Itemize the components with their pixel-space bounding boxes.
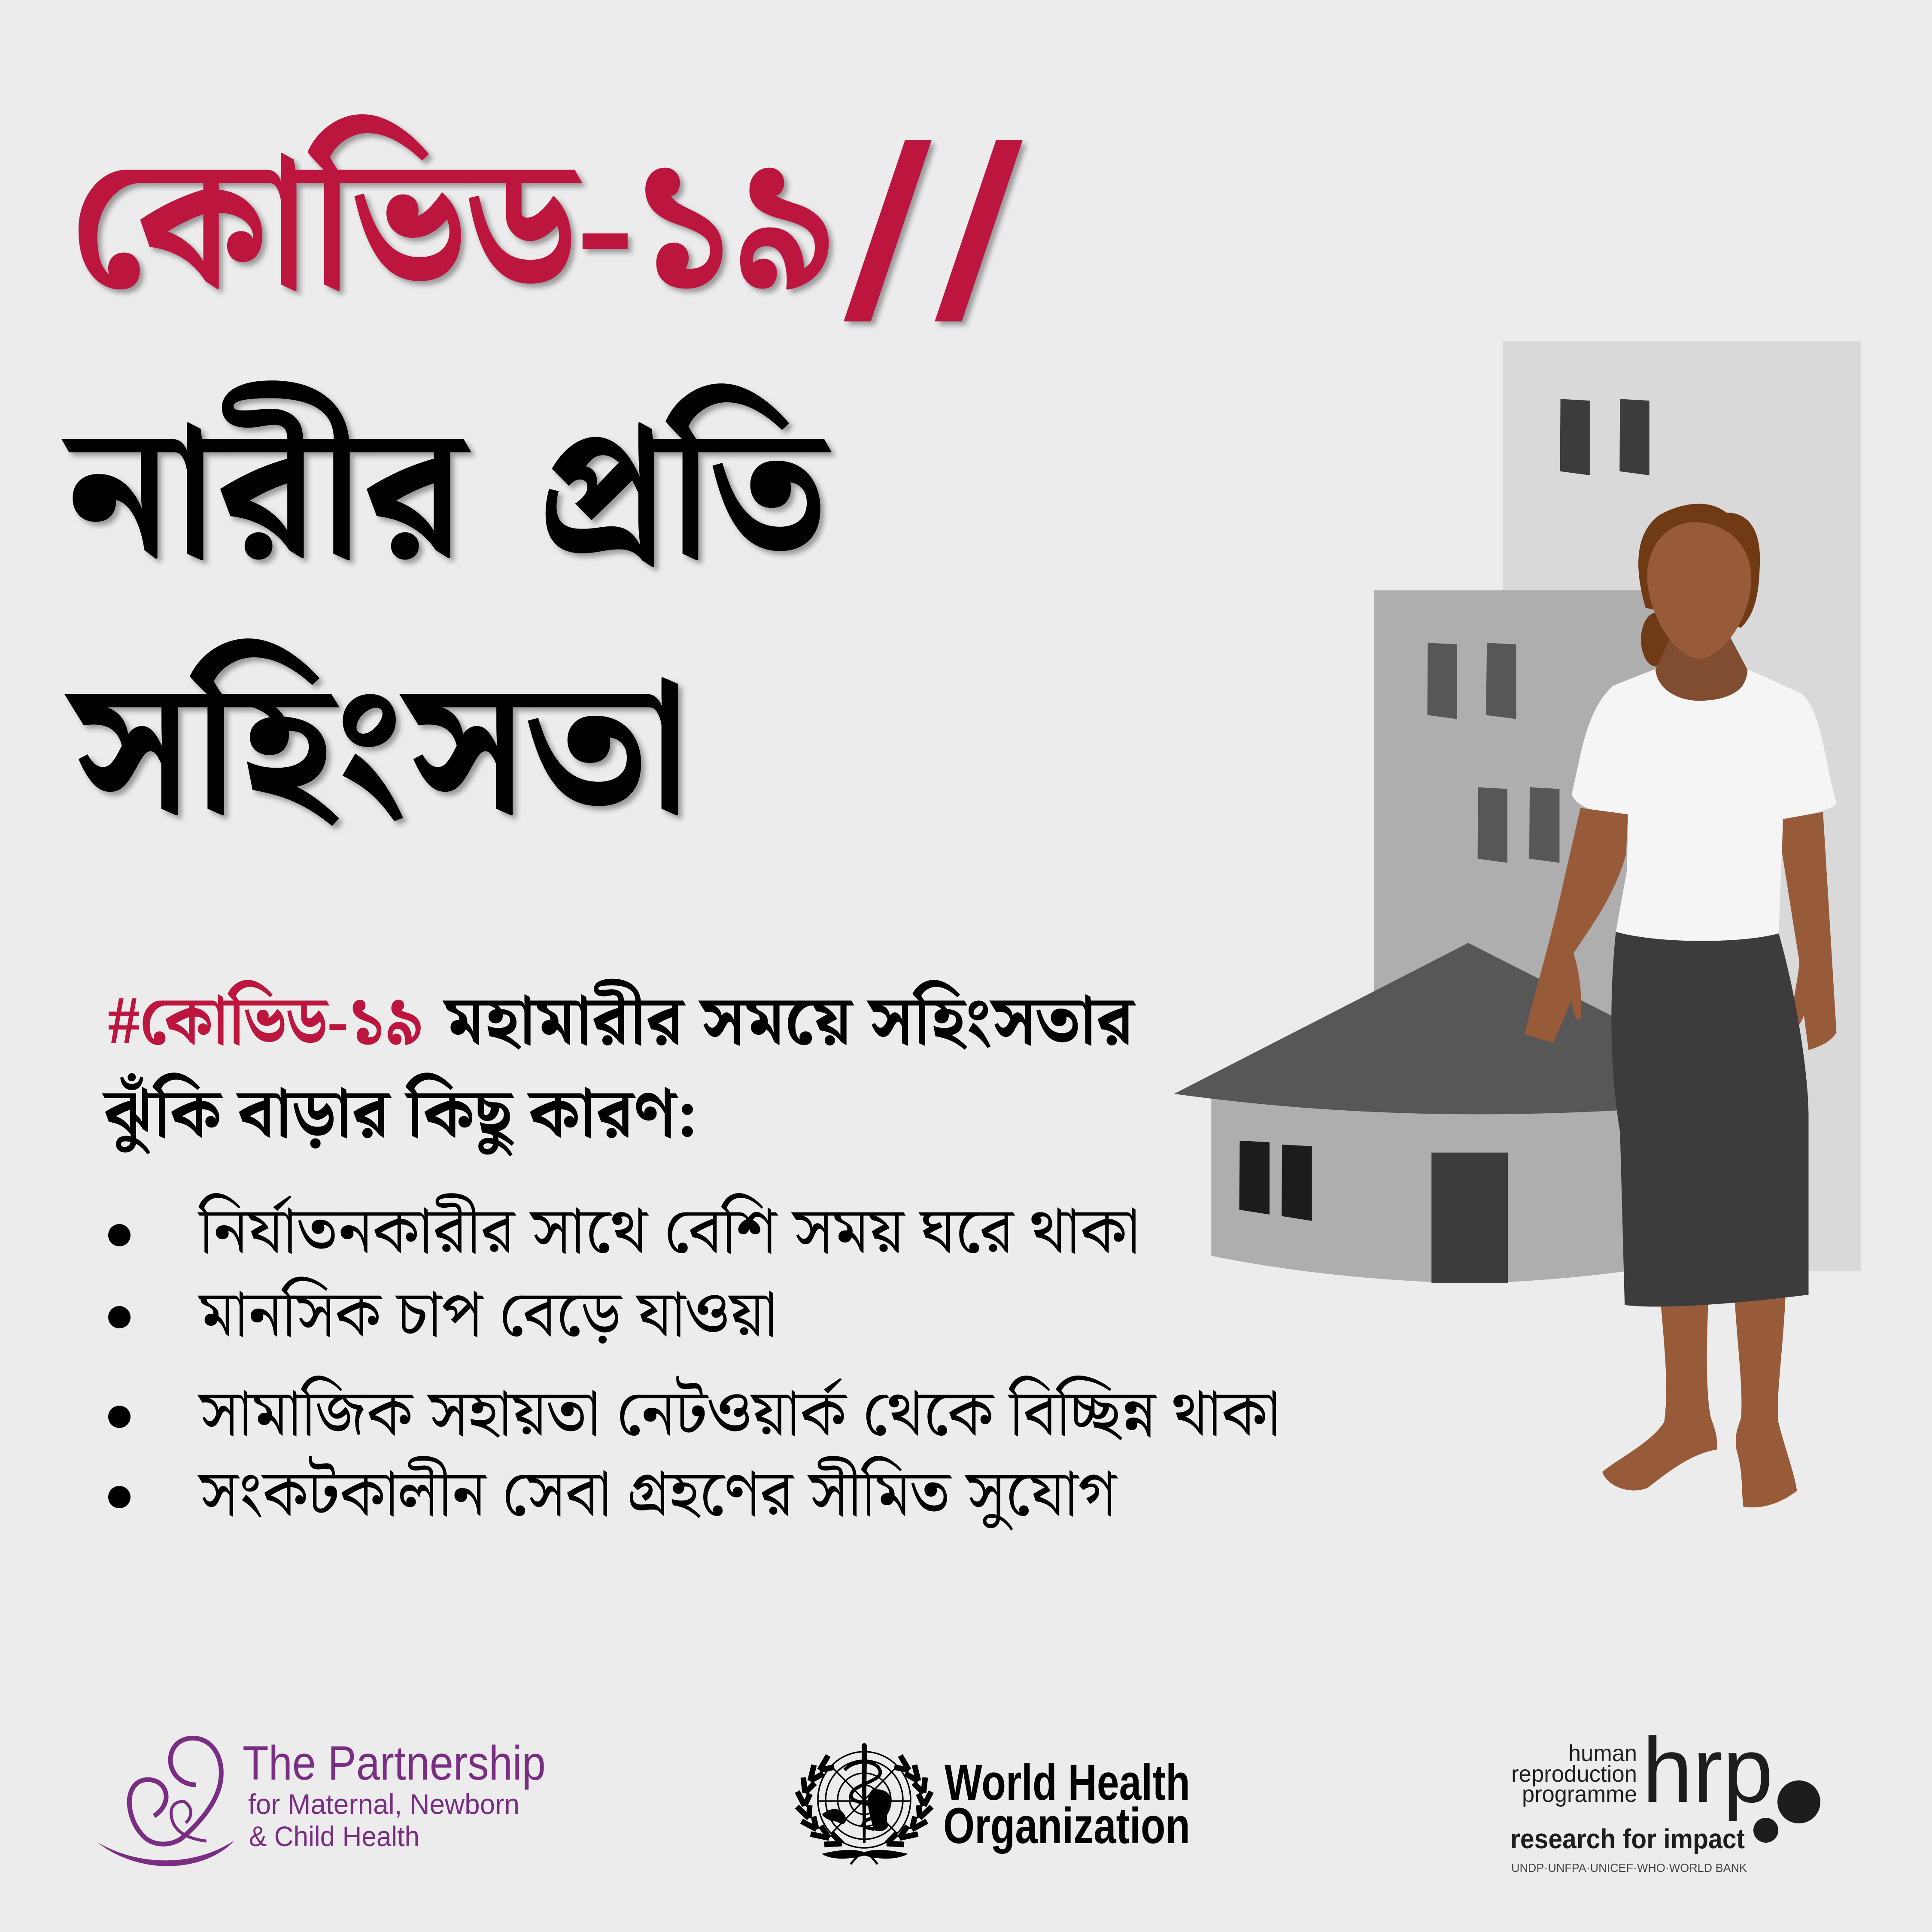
logo: World Health Organization — [797, 1743, 1190, 1864]
neck — [1655, 636, 1747, 701]
dots — [1753, 1780, 1820, 1843]
title: violence against women, first line: নারীর — [59, 378, 474, 594]
illustration: buildings, house and woman — [1174, 341, 1861, 1507]
logo: human reproduction programme — [1510, 1718, 1820, 1874]
globe — [818, 1752, 911, 1848]
logo text: & Child Health — [249, 1820, 419, 1852]
hair and bun — [1641, 613, 1672, 667]
logo text — [243, 1736, 546, 1852]
intro text block: মহামারীর সময়ে সহিংসতার — [442, 978, 1136, 1058]
title: violence against women, first line — [59, 378, 834, 594]
wreath left — [797, 1756, 842, 1844]
logo text: Organization — [943, 1798, 1190, 1854]
programme name — [1511, 1741, 1637, 1807]
programme name: human — [1568, 1741, 1637, 1766]
bullet 4: সংকটকালীন সেবা গ্রহণের সীমিত সুযোগ — [197, 1456, 1118, 1531]
title: violence against women, second line: সহিংসতা — [62, 636, 689, 849]
title: COVID-19 heading: / — [846, 98, 930, 370]
partner list: UNDP·UNFPA·UNICEF·WHO·WORLD BANK — [1511, 1861, 1747, 1874]
middle building — [1374, 590, 1672, 1130]
tagline: research for impact — [1510, 1823, 1745, 1854]
programme name: reproduction — [1511, 1761, 1637, 1787]
icon: mother and child swirl — [97, 1738, 234, 1866]
legs — [1602, 1295, 1717, 1491]
logo text: for Maternal, Newborn — [248, 1788, 519, 1820]
logo text: World Health — [945, 1754, 1190, 1811]
hrp wordmark: hrp — [1642, 1718, 1773, 1822]
title: COVID-19 heading — [71, 98, 1021, 370]
back building — [1503, 341, 1861, 1271]
woman figure — [1525, 504, 1837, 1507]
programme name: programme — [1522, 1781, 1637, 1807]
logo: The Partnership — [97, 1736, 546, 1866]
bullet list of risk factors — [108, 1194, 1280, 1531]
title: COVID-19 heading: কোভিড-১৯ — [71, 112, 839, 325]
intro text block: #কোভিড-১৯ — [108, 979, 425, 1058]
title: violence against women, first line: প্রতি — [539, 381, 834, 594]
bullet 1: নির্যাতনকারীর সাথে বেশি সময় ঘরে থাকা — [197, 1194, 1139, 1267]
face — [1647, 522, 1751, 659]
house — [1174, 943, 1629, 1283]
bullet 3: সামাজিক সহায়তা নেটওয়ার্ক থেকে বিচ্ছিন্ন থাকা — [197, 1376, 1280, 1449]
icon: WHO emblem — [797, 1743, 932, 1864]
intro text block — [102, 978, 1136, 1157]
logo text — [943, 1754, 1190, 1854]
arms — [1525, 808, 1628, 1043]
bullet 2: মানসিক চাপ বেড়ে যাওয়া — [197, 1277, 777, 1350]
ribbon — [822, 1850, 908, 1864]
logo text: The Partnership — [243, 1736, 546, 1790]
staff and snake — [844, 1743, 880, 1843]
continents — [868, 1789, 890, 1831]
skirt — [1611, 932, 1808, 1306]
shirt — [1572, 669, 1837, 941]
title: COVID-19 heading: / — [937, 98, 1021, 370]
wreath right — [887, 1756, 932, 1844]
intro text block: ঝুঁকি বাড়ার কিছু কারণ: — [102, 1072, 699, 1157]
